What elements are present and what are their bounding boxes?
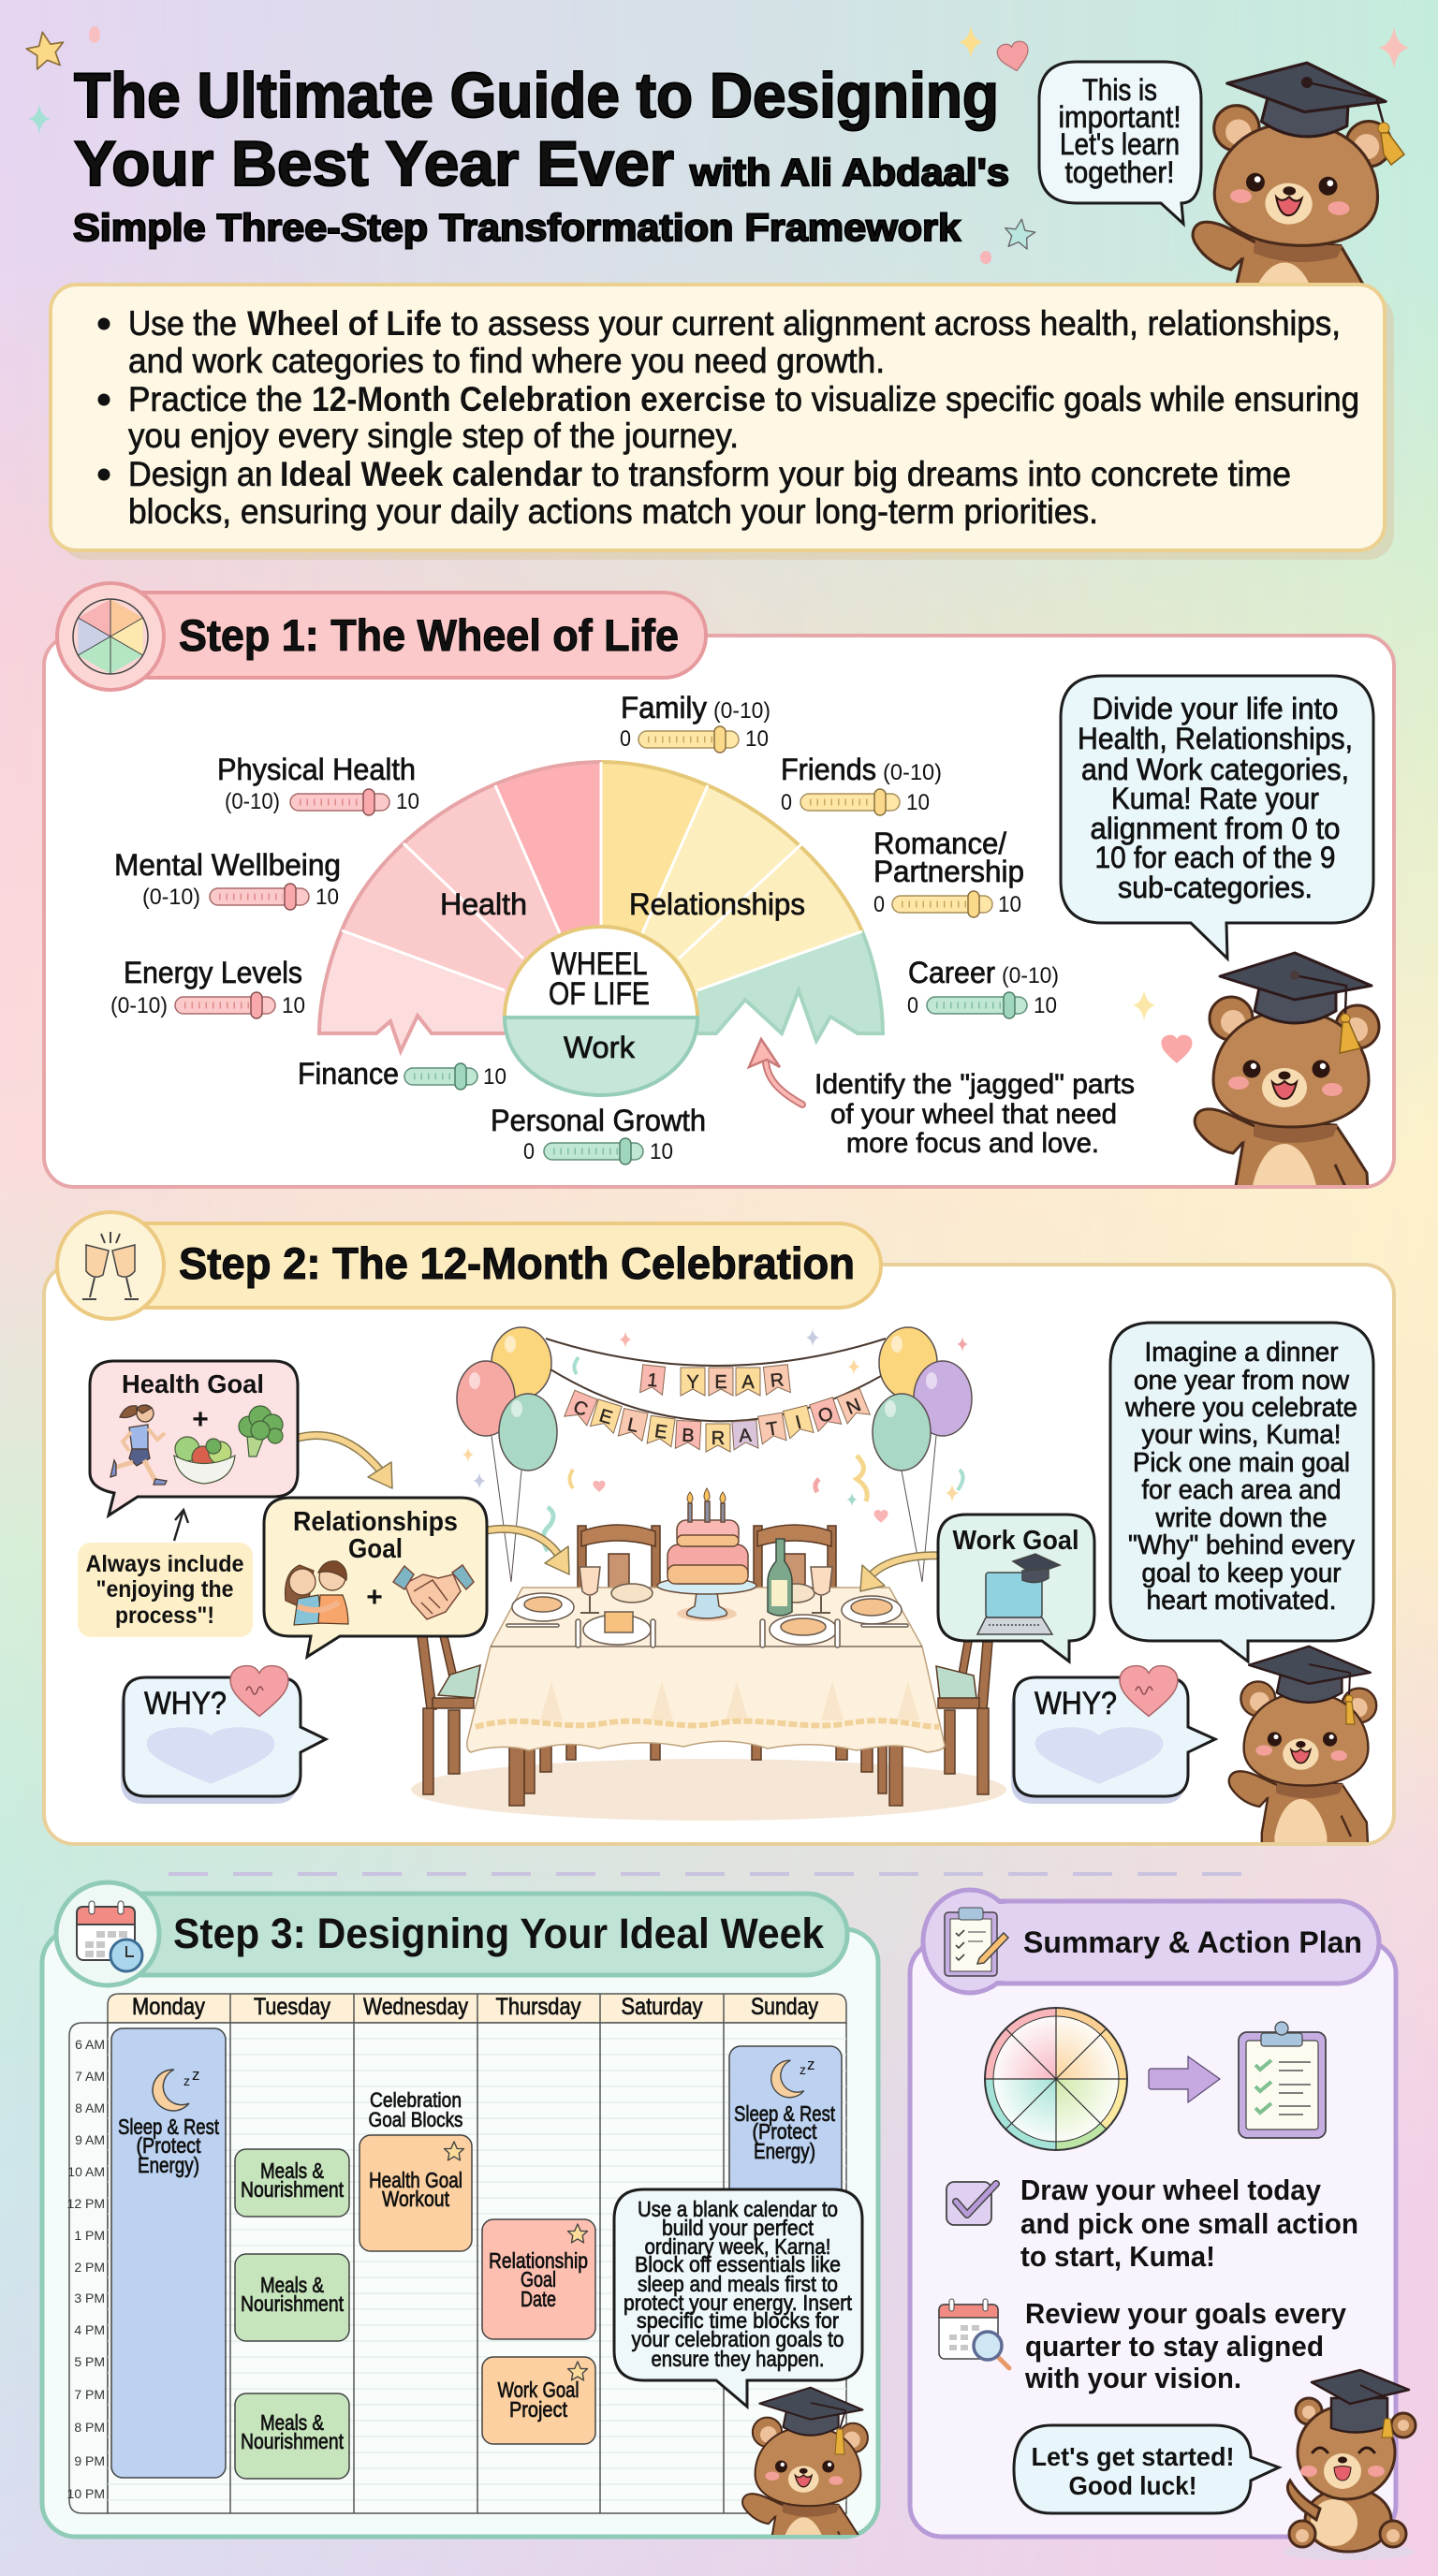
bullet 1	[97, 304, 1341, 380]
time labels: 10 PM	[67, 2486, 105, 2501]
time labels: 9 PM	[74, 2453, 105, 2468]
label: celebration goal blocks: Goal Blocks	[369, 2108, 462, 2131]
speech bubble: step 2 instructions: Pick one main goal	[1133, 1448, 1350, 1478]
block: monday sleep: z	[183, 2073, 190, 2088]
block: monday sleep: z	[192, 2066, 200, 2084]
illustration: banner celebration: E	[596, 1406, 615, 1428]
bullet 2: to visualize specific goals while ensuring	[775, 380, 1359, 418]
callout: why right	[1011, 1666, 1215, 1804]
block: meals 1	[235, 2149, 349, 2217]
summary heading: Summary & Action Plan	[1023, 1925, 1362, 1959]
action: draw your wheel: and pick one small action	[1020, 2207, 1358, 2240]
mascot: sitting bear	[1283, 2370, 1416, 2560]
speech bubble: step 2 instructions: write down the	[1155, 1503, 1328, 1533]
icon: calendar and clock	[56, 1882, 159, 1985]
label: celebration goal blocks: Celebration	[370, 2088, 462, 2112]
block: sunday sleep: z	[807, 2056, 814, 2073]
illustration: banner celebration: N	[844, 1395, 864, 1419]
rating: career: (0-10)	[1002, 963, 1059, 988]
speech bubble: step 3 instructions: protect your energy. Insert	[624, 2291, 853, 2315]
speech bubble: step 1 instructions: Health, Relationships,	[1078, 722, 1353, 755]
wine glasses	[580, 1567, 832, 1613]
block: sunday sleep: Energy)	[754, 2139, 815, 2163]
action: draw your wheel: to start, Kuma!	[1020, 2240, 1215, 2273]
speech bubble: step 3 instructions: specific time blocks for	[637, 2308, 839, 2333]
time labels: 3 PM	[74, 2291, 105, 2305]
speech bubble: step 3 instructions: ensure they happen.	[652, 2347, 824, 2371]
time labels: 5 PM	[74, 2354, 105, 2369]
speech bubble: good luck	[1014, 2425, 1279, 2513]
arrow: to jagged parts	[749, 1039, 802, 1105]
weekday headers: Monday	[132, 1994, 205, 2020]
block: monday sleep: Energy)	[138, 2153, 199, 2177]
callout: health goal: Health Goal	[122, 1369, 264, 1398]
time labels: 8 PM	[74, 2420, 105, 2435]
block: work goal project	[482, 2357, 595, 2444]
arrow: health to relationships	[295, 1435, 392, 1488]
speech bubble: step 2 instructions	[1110, 1323, 1373, 1661]
speech bubble: step 2 instructions: for each area and	[1142, 1475, 1341, 1505]
back chairs	[578, 1525, 836, 1591]
callout: relationships goal	[264, 1498, 487, 1657]
icon: champagne toast	[57, 1212, 164, 1319]
rating: career: 10	[1034, 993, 1057, 1018]
bullet 2: Practice the	[128, 380, 302, 418]
step 1 heading: Step 1: The Wheel of Life	[179, 610, 679, 660]
weekday headers: Saturday	[622, 1994, 703, 2020]
rating: romance partnership: 10	[998, 892, 1021, 917]
callout: why left: WHY?	[144, 1686, 227, 1721]
weekday headers: Tuesday	[254, 1994, 330, 2020]
block: relationship goal date: Relationship	[489, 2248, 588, 2273]
speech bubble: step 1 instructions	[1061, 676, 1373, 959]
callout: relationships goal: Goal	[348, 1534, 403, 1564]
speech bubble: this is important: important!	[1058, 100, 1181, 134]
left side chair	[418, 1636, 480, 1794]
action: review your goals	[939, 2297, 1347, 2394]
time labels: 4 PM	[74, 2322, 105, 2337]
rating: mental wellbeing: Mental Wellbeing	[114, 848, 341, 882]
block: meals 2: Meals &	[260, 2273, 324, 2297]
block: work goal project: Work Goal	[498, 2378, 579, 2402]
illustration: banner 1 year	[546, 1339, 886, 1396]
weekday headers	[132, 1994, 818, 2020]
wheel hub: WHEEL	[550, 946, 648, 982]
bullet 2: you enjoy every single step of the journey.	[128, 417, 739, 455]
icon: salad	[174, 1437, 235, 1484]
callout: jagged parts	[814, 1069, 1135, 1159]
title: Your Best Year Ever	[74, 128, 674, 199]
block: meals 3	[235, 2393, 349, 2479]
speech bubble: step 2 instructions: heart motivated.	[1146, 1586, 1337, 1616]
rating: mental wellbeing	[114, 848, 341, 910]
illustration: floor shadow	[411, 1759, 1006, 1821]
rating: physical health: 10	[396, 789, 419, 814]
rating: romance partnership	[873, 827, 1024, 917]
speech bubble: step 1 instructions: Divide your life into	[1092, 692, 1339, 725]
time labels: 7 PM	[74, 2387, 105, 2402]
speech bubble: step 1 instructions: sub-categories.	[1118, 871, 1313, 904]
panel: step 1 wheel of life	[44, 583, 1394, 1242]
time labels: 9 AM	[75, 2132, 105, 2147]
speech bubble: step 2 instructions: one year from now	[1134, 1366, 1350, 1396]
step 3 heading: Step 3: Designing Your Ideal Week	[173, 1910, 825, 1957]
action: draw your wheel: Draw your wheel today	[1020, 2174, 1322, 2206]
speech bubble: step 3 instructions: ordinary week, Karna!	[644, 2234, 831, 2259]
rating: energy levels: 10	[282, 993, 305, 1018]
wheel hub: Work	[564, 1031, 636, 1064]
rating: mental wellbeing: (0-10)	[142, 885, 200, 910]
callout: jagged parts: of your wheel that need	[830, 1099, 1117, 1130]
illustration: banner 1 year: R	[770, 1369, 785, 1392]
block: health goal workout: Workout	[382, 2187, 450, 2211]
rating: friends: Friends	[781, 753, 876, 786]
divider dashes	[169, 1872, 1242, 1876]
rating: romance partnership: 0	[873, 892, 885, 917]
speech bubble: good luck: Let's get started!	[1032, 2442, 1234, 2471]
wheel hub: OF LIFE	[549, 976, 650, 1012]
action: draw your wheel	[946, 2174, 1358, 2273]
note: enjoying the process: process"!	[115, 1603, 214, 1629]
speech bubble: step 2 instructions: Imagine a dinner	[1144, 1338, 1339, 1368]
speech bubble: this is important	[1039, 62, 1201, 224]
speech bubble: step 3 instructions: sleep and meals first to	[638, 2272, 838, 2296]
callout: relationships goal: +	[366, 1582, 383, 1613]
speech bubble: this is important: This is	[1082, 73, 1157, 107]
illustration: banner 1 year: E	[714, 1372, 727, 1393]
speech bubble: step 3 instructions: build your perfect	[662, 2216, 814, 2240]
time labels: 6 AM	[75, 2037, 105, 2052]
block: sunday sleep: (Protect	[753, 2119, 817, 2144]
bottle	[768, 1539, 792, 1616]
step 2 heading: Step 2: The 12-Month Celebration	[179, 1238, 855, 1288]
time labels: 2 PM	[74, 2260, 105, 2275]
callout: jagged parts: more focus and love.	[846, 1128, 1099, 1159]
block: monday sleep: (Protect	[137, 2133, 201, 2158]
bullet 3: Ideal Week calendar	[280, 455, 582, 493]
rating: personal growth: 10	[650, 1139, 673, 1164]
note: enjoying the process	[78, 1543, 253, 1637]
block: meals 2: Nourishment	[241, 2291, 345, 2316]
callout: work goal: Work Goal	[953, 1526, 1078, 1556]
block: health goal workout: Health Goal	[369, 2168, 462, 2192]
rating: romance partnership: Romance/	[873, 827, 1006, 860]
block: sunday sleep	[729, 2046, 842, 2210]
bullet 1: Use the	[128, 304, 237, 343]
bullet 3: blocks, ensuring your daily actions match your long-term priorities.	[128, 492, 1098, 531]
speech bubble: step 1 instructions: alignment from 0 to	[1090, 812, 1341, 845]
weekday headers: Sunday	[751, 1994, 818, 2020]
arrow: relationships to table	[487, 1529, 569, 1574]
step 2 heading	[94, 1223, 881, 1308]
illustration: banner celebration: O	[815, 1403, 836, 1427]
panel: key takeaways	[51, 285, 1394, 560]
speech bubble: step 3 instructions: Use a blank calendar to	[638, 2197, 838, 2221]
speech bubble: this is important: together!	[1065, 155, 1174, 189]
speech bubble: step 2 instructions: "Why" behind every	[1128, 1530, 1355, 1560]
illustration: banner celebration: R	[712, 1428, 725, 1449]
illustration: banner 1 year: A	[741, 1372, 755, 1393]
note: enjoying the process: Always include	[86, 1551, 244, 1577]
icon: hugging couple	[286, 1561, 348, 1625]
block: relationship goal date: Date	[521, 2287, 556, 2311]
callout: relationships goal: Relationships	[293, 1507, 458, 1537]
speech bubble: step 3 instructions	[614, 2189, 862, 2407]
block: relationship goal date	[482, 2219, 595, 2339]
bullet 2: 12-Month Celebration exercise	[312, 380, 766, 418]
illustration: banner celebration: B	[682, 1426, 695, 1446]
bullet 3: to transform your big dreams into concrete time	[592, 455, 1291, 493]
rating: family: Family	[621, 691, 707, 724]
mascot: step 2 bear	[1228, 1646, 1378, 1842]
action: review your goals: Review your goals every	[1025, 2297, 1347, 2330]
rating: personal growth: Personal Growth	[491, 1104, 706, 1137]
chart: wheel of life: Health	[440, 887, 527, 921]
speech bubble: this is important: Let's learn	[1060, 127, 1180, 161]
callout: health goal	[90, 1361, 298, 1515]
rating: finance: 10	[483, 1064, 506, 1090]
speech bubble: step 1 instructions: 10 for each of the 9	[1095, 841, 1335, 874]
arrow: wheel to plan	[1149, 2056, 1220, 2102]
time labels: 7 AM	[75, 2069, 105, 2084]
block: sunday sleep: Sleep & Rest	[734, 2101, 835, 2126]
rating: physical health: Physical Health	[217, 753, 416, 786]
bullet 1: Wheel of Life	[247, 304, 442, 343]
block: monday sleep	[111, 2028, 226, 2478]
illustration: banner 1 year: Y	[686, 1372, 699, 1393]
bullet 1: to assess your current alignment across health, relationships,	[451, 304, 1341, 343]
arrow: note to health goal	[174, 1510, 188, 1541]
speech bubble: good luck: Good luck!	[1069, 2471, 1196, 2500]
time labels: 1 PM	[74, 2228, 105, 2243]
mascot: top bear waving	[1186, 57, 1404, 371]
rating: family	[620, 691, 770, 753]
summary heading	[923, 1890, 1379, 1993]
bullet 2	[97, 380, 1359, 455]
rating: personal growth: 0	[523, 1139, 535, 1164]
callout: why right: WHY?	[1034, 1686, 1117, 1721]
rating: family: (0-10)	[713, 698, 770, 724]
callout: jagged parts: Identify the "jagged" parts	[814, 1069, 1135, 1100]
callout: health goal: +	[192, 1404, 209, 1435]
time labels: 8 AM	[75, 2100, 105, 2115]
rating: family: 0	[620, 726, 631, 752]
action: review your goals: with your vision.	[1024, 2362, 1241, 2394]
illustration: banner celebration: A	[739, 1426, 753, 1446]
block: health goal workout	[360, 2135, 472, 2251]
title: The Ultimate Guide to Designing	[74, 60, 999, 131]
illustration: banner celebration: L	[625, 1414, 640, 1437]
panel: summary and action plan	[910, 1890, 1416, 2560]
icon: sparkle and heart	[1132, 989, 1193, 1063]
time labels: 12 PM	[67, 2196, 105, 2211]
rating: career: 0	[907, 993, 918, 1018]
rating: personal growth	[491, 1104, 706, 1164]
time labels	[67, 2037, 105, 2501]
weekday headers: Thursday	[496, 1994, 581, 2020]
mascot: step 3 bear	[741, 2387, 869, 2535]
rating: physical health: (0-10)	[225, 789, 280, 814]
note: enjoying the process: "enjoying the	[95, 1576, 234, 1603]
block: meals 3: Nourishment	[241, 2429, 345, 2453]
chart: wheel of life	[319, 762, 883, 1095]
rating: friends	[781, 753, 942, 815]
title	[73, 60, 1009, 249]
speech bubble: step 1 instructions: and Work categories,	[1081, 753, 1349, 786]
rating: energy levels: Energy Levels	[124, 956, 302, 989]
speech bubble: step 2 instructions: your wins, Kuma!	[1142, 1420, 1341, 1450]
arrow: work to table	[860, 1556, 942, 1591]
rating: finance: Finance	[298, 1057, 399, 1090]
block: monday sleep: Sleep & Rest	[118, 2115, 219, 2139]
chart: summary wheel	[985, 2008, 1127, 2150]
rating: energy levels: (0-10)	[110, 993, 168, 1018]
right side chair	[936, 1642, 992, 1794]
illustration: banner celebration: C	[570, 1397, 591, 1421]
illustration: banner celebration: I	[794, 1412, 803, 1433]
table legs	[509, 1741, 902, 1806]
icon: broccoli	[239, 1406, 283, 1456]
icon: clipboard and pencil	[945, 1908, 1008, 1976]
block: meals 1: Nourishment	[241, 2177, 345, 2202]
speech bubble: step 2 instructions: where you celebrate	[1124, 1393, 1357, 1423]
illustration: banner celebration: E	[653, 1421, 668, 1443]
speech bubble: step 1 instructions: Kuma! Rate your	[1111, 782, 1319, 815]
rating: mental wellbeing: 10	[315, 885, 339, 910]
time labels: 10 AM	[67, 2164, 105, 2179]
illustration: banner 1 year: 1	[646, 1369, 659, 1392]
rating: family: 10	[745, 726, 769, 752]
icon: runner	[110, 1405, 167, 1485]
bullet 3: Design an	[128, 455, 272, 493]
rating: romance partnership: Partnership	[873, 855, 1024, 888]
illustration: balloons	[457, 1327, 972, 1582]
bullet 3	[97, 455, 1291, 531]
block: meals 2	[235, 2254, 349, 2341]
rating: career	[907, 956, 1059, 1018]
icon: laptop and mortarboard	[977, 1554, 1060, 1634]
block: meals 3: Meals &	[260, 2410, 324, 2435]
icon: handshake	[393, 1565, 474, 1619]
action: review your goals: quarter to stay aligned	[1025, 2330, 1324, 2363]
illustration: confetti	[462, 1328, 968, 1551]
callout: why left	[121, 1666, 326, 1804]
block: sunday sleep: z	[800, 2062, 806, 2077]
speech bubble: step 3 instructions: your celebration goals to	[631, 2327, 844, 2351]
rating: finance	[298, 1057, 506, 1090]
rating: friends: 0	[781, 790, 792, 815]
illustration: dining table scene	[418, 1488, 992, 1806]
illustration: banner celebration	[550, 1369, 881, 1452]
block: relationship goal date: Goal	[521, 2267, 556, 2291]
wheel hub	[505, 927, 697, 1095]
callout: work goal	[938, 1515, 1094, 1661]
place settings	[506, 1584, 908, 1647]
block: meals 1: Meals &	[260, 2159, 324, 2183]
title: Simple Three-Step Transformation Framework	[73, 206, 961, 249]
step 3 heading	[94, 1894, 847, 1975]
tablecloth	[467, 1588, 945, 1752]
illustration: banner celebration: T	[765, 1418, 780, 1441]
speech bubble: step 3 instructions: Block off essentials like	[635, 2252, 841, 2276]
rating: career: Career	[908, 956, 995, 989]
mascot: step 1 bear	[1193, 951, 1380, 1185]
block: work goal project: Project	[509, 2397, 568, 2422]
decorations: title stars and hearts	[24, 25, 1410, 264]
rating: energy levels	[110, 956, 305, 1018]
bullet 1: and work categories to find where you need growth.	[128, 342, 885, 380]
rating: friends: (0-10)	[883, 760, 942, 785]
cake	[657, 1488, 756, 1621]
panel: step 3 ideal week	[42, 1882, 878, 2576]
rating: friends: 10	[906, 790, 930, 815]
step 1 heading	[94, 593, 706, 678]
rating: physical health	[217, 753, 419, 815]
weekday headers: Wednesday	[363, 1994, 468, 2020]
speech bubble: step 2 instructions: goal to keep your	[1142, 1559, 1342, 1588]
icon: checklist clipboard	[1239, 2022, 1326, 2138]
chart: wheel of life: Relationships	[629, 887, 805, 921]
label: celebration goal blocks	[369, 2088, 462, 2131]
icon: wheel badge	[57, 583, 164, 690]
title: with Ali Abdaal's	[689, 151, 1009, 194]
panel: step 2 12-month celebration	[44, 1212, 1394, 1878]
calendar grid	[67, 1994, 846, 2513]
